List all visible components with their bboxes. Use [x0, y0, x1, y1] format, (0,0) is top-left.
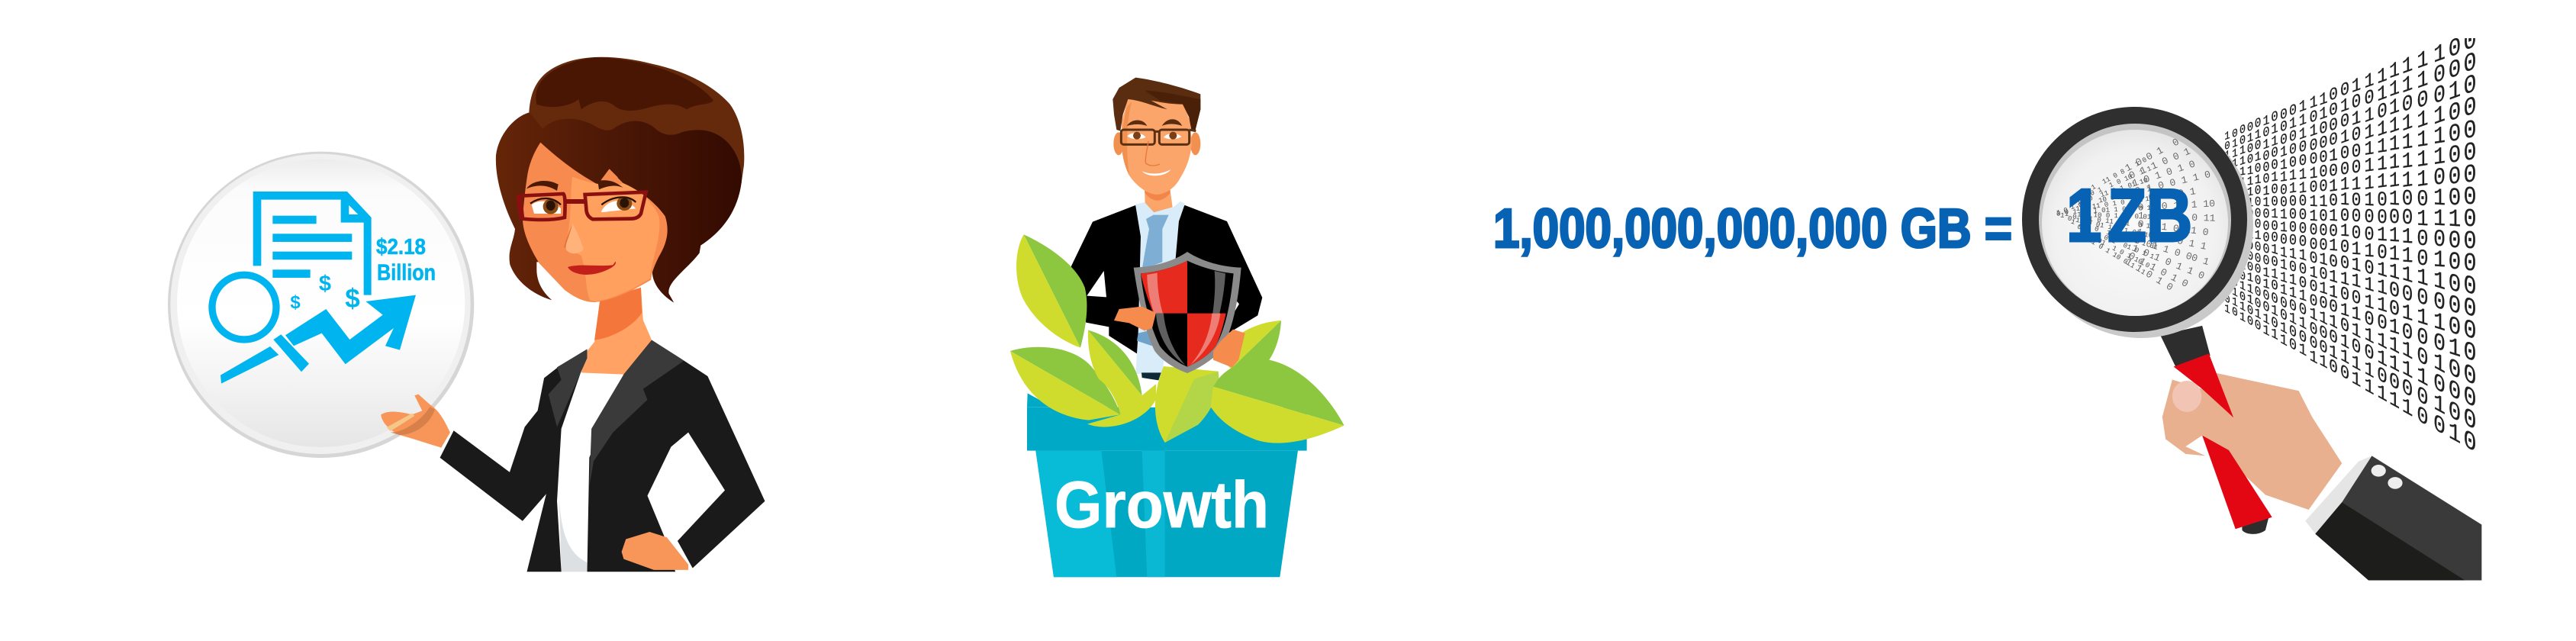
size equation: 1,000,000,000,000 GB =	[1493, 198, 2012, 259]
binary data wall: 0101	[2255, 116, 2261, 166]
1 ZB label: 1 ZB	[2066, 175, 2192, 258]
binary data wall: 1101	[2352, 254, 2361, 327]
binary data wall: 0100	[2271, 195, 2278, 246]
binary data wall: 001	[2352, 141, 2361, 195]
binary data wall: 0111	[2232, 126, 2238, 171]
binary data wall: 0110	[2329, 250, 2338, 318]
magnified binary: 1 0 1 1 0 11 0 1 0 10	[2059, 211, 2155, 231]
icon: report, magnifier and rising arrow	[208, 192, 416, 384]
binary data wall: 1010	[2263, 112, 2269, 165]
binary data wall: 1010	[2271, 242, 2278, 295]
magnified binary	[2056, 139, 2215, 290]
binary data wall: 0101	[2299, 299, 2307, 362]
binary data wall: 000	[2463, 116, 2477, 192]
binary data wall: 1011	[2240, 278, 2246, 326]
magnifier ring	[2022, 107, 2247, 332]
magnified binary: 1 0 10 0 1 1	[2136, 227, 2207, 253]
binary data wall: 1010	[2329, 310, 2338, 379]
market size figure: $2.18	[376, 235, 426, 259]
binary data wall: 0001	[2280, 105, 2288, 162]
binary data wall: 101	[2329, 145, 2338, 196]
binary data wall: 1011	[2389, 188, 2400, 267]
binary data wall: 000	[2319, 147, 2328, 197]
binary data wall: 1011	[2352, 318, 2361, 393]
binary data wall: 111	[2417, 126, 2429, 193]
binary data wall: 0110	[2232, 275, 2238, 321]
woman figure	[381, 57, 765, 572]
magnified binary: 0 1 1 0 1 01 0 1 1	[2076, 223, 2156, 261]
binary data wall: 1010	[2433, 347, 2446, 443]
binary data wall: 1001	[2433, 39, 2446, 132]
icon: dollar signs: $	[290, 292, 301, 313]
binary data wall: 0000	[2463, 183, 2477, 279]
magnified binary: 0 01 1 0 00 1	[2133, 234, 2211, 268]
infographic canvas	[168, 38, 2481, 580]
binary data wall: 011	[2224, 169, 2230, 201]
magnified binary: 0 1 1 0 10 0 1 1 0 01 1	[2056, 211, 2159, 221]
magnified binary: 1 1 11 0 8 1 0	[2083, 156, 2148, 195]
magnified binary: 1 0 1 0 1 0	[2131, 158, 2197, 189]
binary data wall: 1100	[2310, 192, 2317, 253]
binary data wall: 1110	[2240, 237, 2246, 284]
binary data wall: 1011	[2232, 197, 2238, 240]
binary data wall: 1101	[2402, 52, 2413, 137]
businessman body and shield among leaves	[1010, 201, 1344, 443]
binary data wall: 0001	[2255, 195, 2261, 244]
binary data wall: 1001	[2299, 246, 2307, 307]
binary data wall: 1010	[2224, 129, 2230, 172]
binary data wall: 1101	[2417, 45, 2429, 135]
binary data wall: 0010	[2449, 32, 2461, 129]
magnified binary: 0 1 1 0 0 1 8	[2127, 141, 2203, 182]
binary data wall: 0000	[2463, 25, 2477, 126]
magnified binary: 1 1 0 1 0	[2124, 256, 2175, 293]
binary data wall: 0110	[2271, 108, 2278, 163]
hand holding magnifier	[2160, 326, 2481, 580]
binary data wall: 111	[2247, 163, 2253, 200]
plant pot	[1027, 393, 1307, 577]
binary data wall: 1010	[2352, 75, 2361, 147]
binary data wall: 0001	[2352, 190, 2361, 260]
binary data wall: 1101	[2377, 63, 2388, 143]
binary data wall: 1010	[2417, 263, 2429, 352]
binary data wall: 0110	[2280, 194, 2288, 249]
binary data wall: 0100	[2449, 184, 2461, 277]
binary data wall: 0110	[2364, 256, 2375, 332]
binary data wall: 111	[2377, 134, 2388, 195]
magnified binary: 1 0 11 0 1 01 10	[2076, 176, 2149, 207]
magnified binary: 11 0 1 10 0 1 1	[2086, 236, 2146, 277]
binary data wall: 0001	[2449, 353, 2461, 452]
binary data wall: 010	[2310, 150, 2317, 198]
binary data wall: 001	[2263, 159, 2269, 199]
magnified binary: 0 1 1 0 10 1 1	[2082, 165, 2153, 201]
binary data wall: 0101	[2340, 252, 2349, 323]
binary data wall: 1001	[2389, 259, 2400, 342]
binary data wall: 1011	[2364, 322, 2375, 401]
binary data wall: 111	[2402, 129, 2413, 194]
binary data wall: 0011	[2402, 186, 2413, 269]
binary data wall: 0010	[2377, 188, 2388, 265]
magnified binary: 1 0 11 0 1	[2136, 185, 2197, 205]
binary data wall: 1010	[2340, 190, 2349, 259]
binary data wall: 0100	[2310, 248, 2317, 311]
binary data wall: 111	[2389, 132, 2400, 194]
magnified binary: 0 1 0 0 1 1 0 1	[2133, 166, 2223, 197]
binary data wall: 0110	[2240, 196, 2246, 241]
binary data wall: 0000	[2255, 240, 2261, 289]
binary data wall: 0101	[2224, 273, 2230, 317]
binary data wall: 1001	[2224, 235, 2230, 278]
binary data wall: 0100	[2289, 101, 2297, 159]
magnifier, hand and equation	[1496, 107, 2481, 580]
binary data wall: 1110	[2377, 257, 2388, 337]
panel: zettabyte magnifier	[1493, 38, 2481, 580]
binary data wall: 111	[2364, 137, 2375, 195]
binary data wall: 011	[2299, 152, 2307, 198]
magnified binary: 0 1 0 10 1 10	[2137, 198, 2215, 214]
binary data wall: 1001	[2232, 236, 2238, 281]
binary data wall: 0100	[2289, 295, 2297, 356]
binary data wall: 0011	[2280, 292, 2288, 351]
magnified binary: 0 1 1 0 11 0	[2137, 218, 2209, 238]
binary data wall: 1101	[2402, 335, 2413, 424]
binary data wall: 0110	[2340, 314, 2349, 386]
icon: dollar signs: $	[319, 272, 331, 296]
binary data wall: 1001	[2247, 196, 2253, 243]
binary data wall: 1011	[2364, 68, 2375, 145]
binary data wall: 0010	[2255, 283, 2261, 335]
binary data wall: 0011	[2263, 287, 2269, 340]
panel: market value with woman and bubble	[168, 57, 765, 572]
binary data wall: 1010	[2433, 266, 2446, 359]
magnified binary: 1 0 1 0 1 01 1 0 1 0 11	[2056, 204, 2156, 217]
businessman head	[1113, 78, 1200, 212]
binary data wall: 1001	[2364, 188, 2375, 263]
binary data wall: 1101	[2433, 185, 2446, 275]
binary data wall: 0101	[2224, 198, 2230, 239]
binary data wall: 1000	[2319, 192, 2328, 255]
binary data wall: 1010	[2402, 261, 2413, 346]
magnified binary: 0 1 1 0 1 0	[2127, 250, 2190, 290]
bubble	[168, 152, 474, 458]
magnified binary: 1 0 0 1 0 0	[2124, 130, 2191, 174]
binary data wall: 1100	[2247, 281, 2253, 330]
binary data wall: 0001	[2449, 268, 2461, 365]
binary data wall: 1010	[2319, 249, 2328, 314]
market size figure	[376, 235, 436, 285]
magnified binary: 1 0 1 10 1 0 11 0 1	[2070, 185, 2152, 211]
binary data wall: 0100	[2417, 341, 2429, 433]
magnified binary: 1 0 01 1 0 1 10 0	[2082, 230, 2151, 270]
binary data wall: 1001	[2319, 306, 2328, 374]
binary data wall: 1101	[2389, 331, 2400, 416]
binary data wall: 1011	[2289, 244, 2297, 302]
icon: dollar signs: $	[345, 284, 360, 314]
panel: growth with businessman	[1010, 78, 1344, 577]
market size figure: Billion	[377, 260, 436, 285]
binary data wall: 1001	[2310, 304, 2317, 369]
binary data wall: 0101	[2329, 191, 2338, 256]
magnified binary: 0 1 0 11 0 1 0 10 1	[2063, 195, 2149, 214]
magnifier lens	[2039, 124, 2231, 316]
pot label: Growth	[1055, 469, 1269, 542]
binary data wall: 0000	[2289, 193, 2297, 250]
binary data wall: 0001	[2247, 238, 2253, 286]
binary data wall: 001	[2232, 166, 2238, 200]
binary data wall: 0100	[2247, 120, 2253, 168]
binary data wall: 1101	[2377, 327, 2388, 408]
magnified binary: 1 1 0 0 1 10 1 0 1 01	[2070, 218, 2159, 252]
binary data wall: 0000	[2463, 358, 2477, 461]
binary data wall: 1100	[2319, 89, 2328, 154]
binary data wall: 010	[2271, 158, 2278, 198]
magnified binary: 1 1 0 01 0 11	[2138, 210, 2216, 224]
binary data wall: 001	[2340, 143, 2349, 196]
binary data wall: 000	[2449, 119, 2461, 192]
binary data wall: 0101	[2271, 289, 2278, 345]
magnified binary: 0 1 0 01 1 0 1 01 1 0	[2067, 214, 2157, 241]
binary data wall: 0011	[2240, 122, 2246, 169]
binary data wall: 110	[2280, 156, 2288, 199]
binary data wall: 110	[2240, 164, 2246, 200]
binary data wall: 010	[2255, 161, 2261, 199]
binary data wall: 1111	[2389, 58, 2400, 140]
binary data wall: 011	[2289, 154, 2297, 198]
binary data wall: 0101	[2340, 79, 2349, 150]
binary data wall: 110	[2433, 123, 2446, 192]
binary data wall: 0000	[2329, 83, 2338, 152]
binary data wall: 0000	[2463, 270, 2477, 370]
binary data wall: 1111	[2280, 243, 2288, 300]
binary data wall: 0000	[2299, 193, 2307, 252]
binary data wall: 1010	[2310, 92, 2317, 156]
binary data wall: 0011	[2263, 240, 2269, 293]
binary data wall	[2225, 38, 2475, 450]
icon: dollar signs	[290, 272, 360, 314]
binary data wall: 1110	[2299, 97, 2307, 158]
magnifier shadow	[2029, 114, 2253, 338]
binary data wall: 1000	[2263, 195, 2269, 246]
binary data wall: 0100	[2417, 185, 2429, 272]
magnified binary: 1 0 1 0 1 1 0	[2130, 243, 2206, 282]
